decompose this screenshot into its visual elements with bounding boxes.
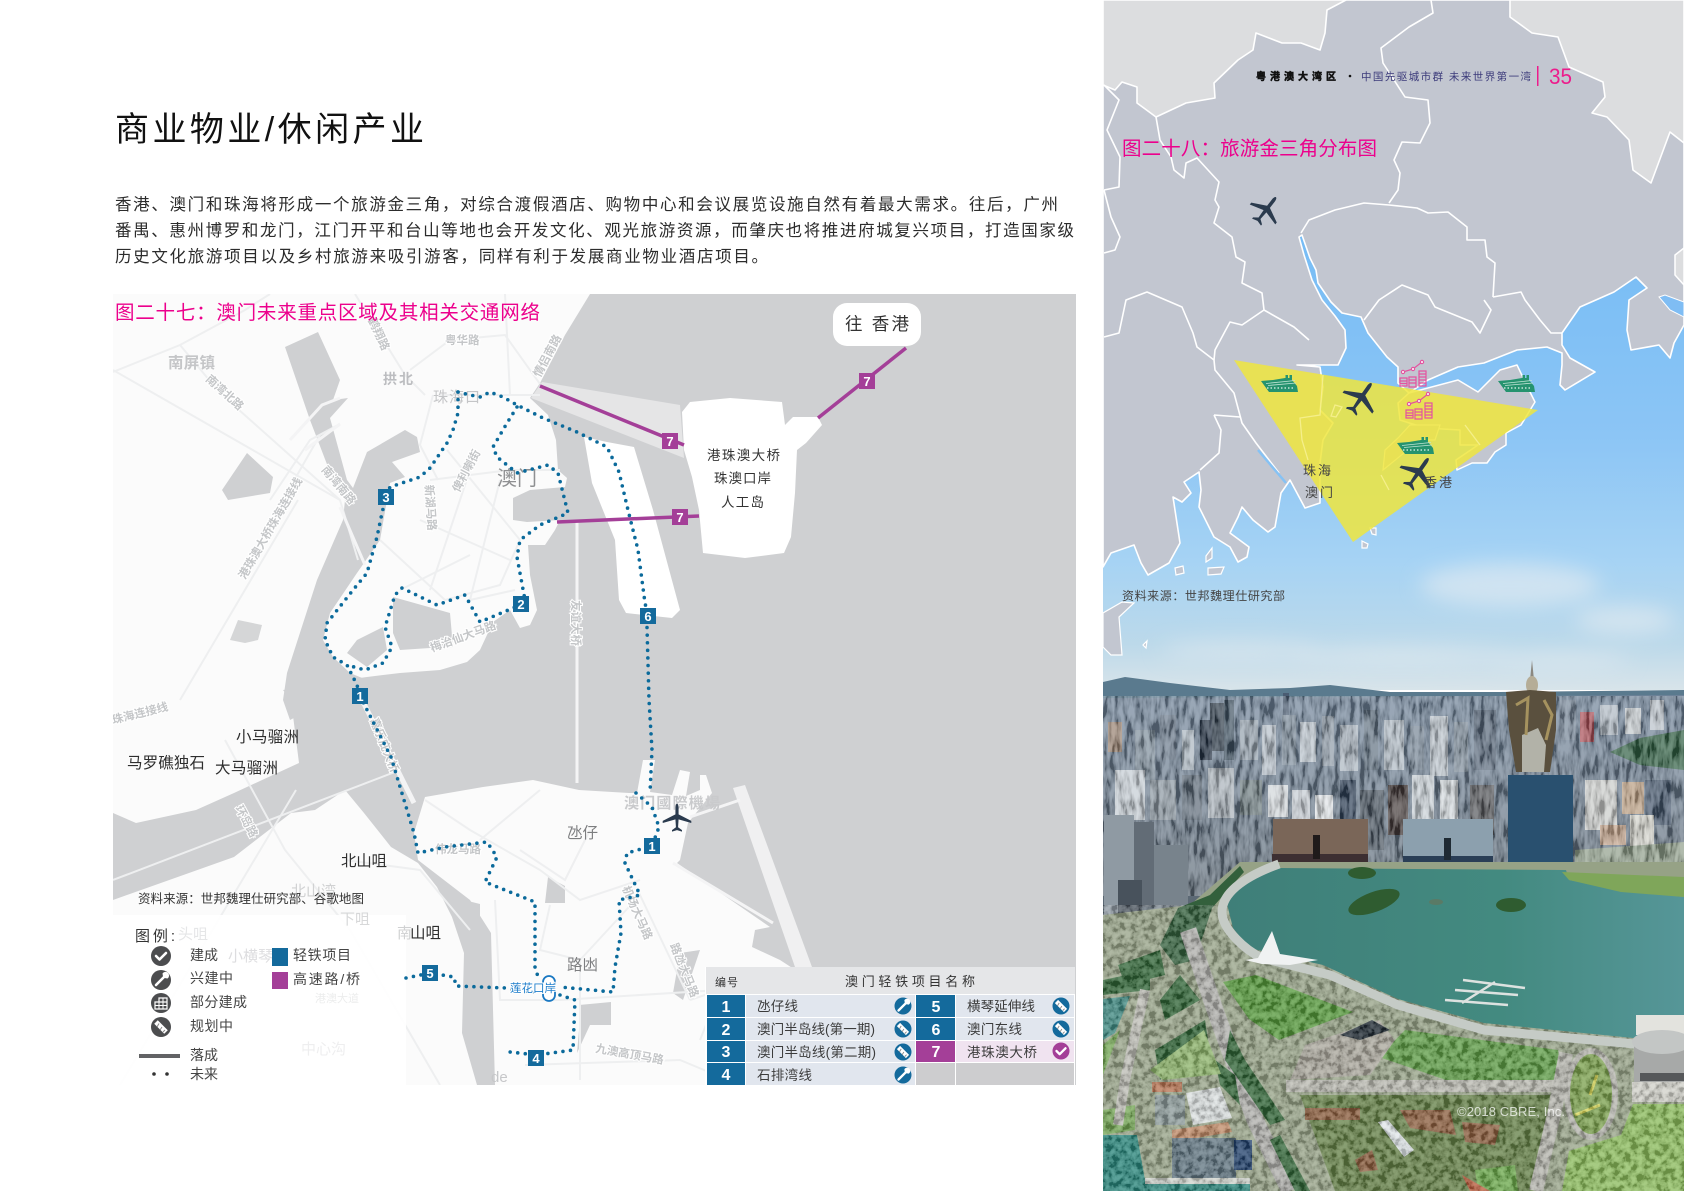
island label: 珠澳口岸	[714, 471, 771, 486]
ship: west	[1261, 375, 1298, 392]
legend: partly built: 部分建成	[190, 994, 247, 1010]
city labels: 澳门	[1305, 485, 1333, 500]
island label: 人工岛	[721, 495, 764, 510]
road and place labels on map: 北山咀	[341, 852, 387, 870]
table: Macau light rail projects: 编号	[715, 975, 738, 989]
white canopy	[1245, 931, 1318, 965]
runway	[733, 785, 812, 967]
water: inner bays	[222, 453, 453, 667]
blue-grey hotel block	[1403, 819, 1493, 865]
row numbers: 3	[722, 1044, 731, 1061]
road and place labels on map: 澳门	[497, 467, 537, 490]
row names: 石排湾线	[757, 1067, 812, 1083]
bottom-left glazed building	[1145, 1122, 1252, 1184]
legend: future dots: 未来	[190, 1066, 218, 1082]
pale fragment at right edge	[1675, 248, 1684, 285]
road and place labels on map: 新湖马路	[422, 484, 439, 532]
route number markers	[352, 373, 875, 1066]
road and place labels on map: 情侣南路	[530, 332, 564, 379]
road and place labels on map: 拱北	[383, 371, 413, 387]
table: Macau light rail projects: 澳门轻铁项目名称	[845, 974, 975, 989]
road and place labels on map	[110, 315, 720, 1067]
island label	[707, 448, 780, 510]
pond	[230, 620, 262, 643]
left-side towers	[1104, 815, 1188, 920]
legend: completed line	[139, 1047, 218, 1063]
legend: light rail swatch	[272, 947, 351, 966]
route number markers: 1	[648, 839, 656, 854]
row names: 澳门东线	[967, 1022, 1022, 1037]
faint labels under legend: 港澳大道	[315, 991, 359, 1005]
page header: 粤港澳大湾区	[1256, 70, 1336, 83]
water: bays in Coloane	[464, 877, 700, 1053]
road and place labels on map: 鹤翔路	[365, 315, 393, 353]
station: Lotus checkpoint: 莲花口岸	[510, 982, 556, 995]
road and place labels on map: 氹仔	[567, 824, 598, 842]
photo: Macau skyline	[1103, 660, 1684, 1191]
figure 27 heading: 图二十七：澳门未来重点区域及其相关交通网络	[115, 302, 540, 324]
brown hotel block	[1272, 819, 1368, 863]
left water	[1103, 996, 1130, 1040]
route number markers: 7	[676, 510, 684, 525]
panel: right column	[1103, 0, 1684, 1191]
row numbers: 7	[932, 1044, 941, 1061]
row names: 澳门半岛线(第一期)	[757, 1021, 875, 1037]
lake	[1227, 868, 1684, 1038]
green plot	[1475, 1165, 1518, 1191]
north-south avenue	[1536, 1053, 1566, 1191]
road and place labels on map: 北山湾	[291, 883, 336, 900]
title: 商业物业/休闲产业	[115, 111, 424, 149]
coin chart icon: upper	[1400, 360, 1426, 387]
road and place labels on map: 友谊大桥	[569, 600, 583, 646]
legend: under construction	[151, 970, 233, 990]
road and place labels on map: 机场大马路	[619, 884, 656, 942]
legend: completed line: 落成	[190, 1047, 218, 1063]
city base	[1103, 695, 1684, 925]
legend: 图例:	[135, 928, 175, 945]
status icons	[894, 998, 1070, 1084]
city labels: 珠海	[1303, 463, 1331, 478]
marina piers	[1445, 980, 1525, 1005]
city labels: 香港	[1424, 475, 1452, 490]
intro paragraph: 香港、澳门和珠海将形成一个旅游金三角，对综合渡假酒店、购物中心和会议展览设施自然有着最大需求。往后，广州	[115, 195, 1058, 214]
blue glass tower	[1508, 775, 1573, 863]
green: park by shore	[1223, 975, 1353, 1040]
golden triangle	[1234, 360, 1538, 542]
route number markers: 2	[517, 597, 525, 612]
plane: south	[1393, 448, 1443, 497]
land: Taipa and Coloane	[414, 760, 812, 1085]
road and place labels on map: 嘉乐庇大桥	[367, 716, 402, 775]
row names: 横琴延伸线	[967, 999, 1035, 1014]
faint labels under legend	[178, 911, 508, 1086]
artificial island	[682, 398, 822, 558]
source note on map: 资料来源：世邦魏理仕研究部、谷歌地图	[138, 891, 364, 906]
bottom-left water	[1103, 1135, 1250, 1191]
rows	[707, 995, 1074, 1085]
promenade	[1222, 864, 1635, 1044]
black roof	[1340, 1020, 1390, 1040]
row numbers: 4	[722, 1067, 731, 1084]
sea and sky	[1103, 230, 1684, 690]
road network	[113, 294, 740, 1085]
legend: light rail swatch: 轻铁项目	[293, 947, 351, 963]
ship: east	[1498, 375, 1535, 392]
top-left pale region	[1103, 0, 1346, 117]
lawn left	[1150, 1030, 1221, 1080]
trees left	[1103, 950, 1310, 1191]
ship icons	[1261, 375, 1298, 392]
coin chart icon: lower	[1406, 392, 1432, 419]
tree belt along road	[1160, 866, 1244, 965]
row names: 港珠澳大桥	[967, 1045, 1038, 1060]
dotted light-rail routes	[325, 392, 659, 1055]
row numbers: 2	[722, 1022, 731, 1039]
faint labels under legend: 中心沟	[301, 1041, 346, 1058]
row names: 澳门半岛线(第二期)	[757, 1044, 876, 1060]
green: central field	[1379, 1030, 1562, 1080]
row numbers: 1	[722, 999, 731, 1016]
green strip on far shore	[1562, 872, 1684, 897]
plane icons	[1244, 187, 1443, 497]
land: south-west Zhuhai	[113, 790, 477, 1085]
city texture	[1103, 696, 1684, 896]
pale roadway right	[1632, 1082, 1684, 1102]
reclaimed land east of Macau	[584, 437, 680, 618]
map land	[1103, 0, 1684, 575]
icon: airport plane	[663, 804, 691, 832]
island label: 港珠澳大桥	[707, 448, 780, 463]
Grand Lisboa tower	[1506, 660, 1556, 772]
white shed	[1378, 1120, 1414, 1157]
bottom-right lawn	[1562, 1104, 1684, 1191]
legend: planned	[151, 1017, 233, 1037]
row numbers: 6	[932, 1022, 941, 1039]
depot area	[1300, 1095, 1550, 1191]
light wedge: bridge channel	[531, 382, 684, 458]
page header	[1256, 64, 1572, 89]
station: Lotus checkpoint	[510, 976, 556, 1001]
legend: future dots	[152, 1066, 218, 1082]
road and place labels on map: 俾利喇街	[449, 447, 483, 494]
road and place labels on map: 澳门國際機場	[624, 794, 720, 812]
right-hand low buildings and greenery	[1575, 842, 1684, 885]
bridges	[290, 398, 773, 923]
road and place labels on map: 珠海连接线	[110, 699, 170, 727]
legend: highway swatch	[272, 971, 360, 989]
circular building	[1632, 1015, 1684, 1082]
row numbers	[722, 999, 941, 1084]
callout: to Hong Kong: 往 香港	[845, 314, 910, 334]
copyright: ©2018 CBRE, Inc.	[1457, 1104, 1565, 1119]
construction site	[1290, 1020, 1395, 1080]
page header: 中国先驱城市群 未来世界第一湾	[1361, 70, 1532, 83]
legend backing	[113, 915, 406, 1085]
road and place labels on map: 南湾南路	[319, 463, 359, 508]
land: Zhuhai and Macau peninsula	[113, 294, 590, 823]
main diagonal road	[1188, 930, 1290, 1191]
route number markers: 1	[356, 689, 364, 704]
route number markers: 3	[382, 490, 390, 505]
faint labels under legend: 南	[397, 925, 412, 942]
road and place labels on map: 路凼	[567, 956, 598, 974]
city labels	[1303, 463, 1452, 500]
faint labels under legend: 头咀	[178, 926, 208, 943]
mountains	[1103, 677, 1684, 715]
legend: built	[151, 946, 218, 966]
foreground ground	[1103, 862, 1684, 1191]
green hill	[1610, 730, 1684, 770]
city towers	[1108, 693, 1671, 855]
plane: north	[1244, 187, 1289, 232]
figure 28 heading: 图二十八：旅游金三角分布图	[1122, 138, 1377, 160]
route number markers: 6	[644, 609, 652, 624]
row names	[757, 999, 1038, 1083]
route number markers: 5	[426, 966, 434, 981]
road and place labels on map: 路氹大马路	[667, 941, 702, 1000]
faint labels under legend: 下咀	[340, 911, 370, 928]
route number markers: 4	[532, 1051, 540, 1066]
road and place labels on map: 大马骝洲	[215, 759, 278, 777]
small water inlet at right edge	[1659, 295, 1684, 317]
outlying islands	[1103, 528, 1376, 655]
Hong Kong land	[1398, 365, 1535, 470]
intro paragraph: 历史文化旅游项目以及乡村旅游来吸引游客，同样有利于发展商业物业酒店项目。	[115, 247, 768, 266]
Lantau island	[1383, 425, 1440, 470]
legend	[135, 928, 360, 1082]
legend: built: 建成	[190, 947, 218, 963]
brown roofs	[1305, 1108, 1500, 1172]
road and place labels on map: 马罗礁独石	[127, 754, 205, 772]
road and place labels on map: 珠海口	[433, 389, 480, 406]
water: inner harbour channels	[283, 332, 420, 720]
legend: under construction: 兴建中	[190, 970, 233, 986]
purple highway lines	[540, 348, 906, 522]
row names: 氹仔线	[757, 999, 798, 1014]
oval garden	[1564, 1048, 1618, 1140]
foreground texture	[1103, 905, 1684, 1191]
intro paragraph	[115, 195, 1074, 266]
road and place labels on map: 小马骝洲	[236, 728, 299, 746]
bottom-left white roof building	[1152, 1082, 1232, 1125]
ship: centre	[1397, 437, 1434, 454]
table: Macau light rail projects	[705, 967, 1075, 1085]
road and place labels on map: 梅治仙大马路	[428, 618, 498, 655]
legend: partly built	[151, 993, 247, 1013]
road and place labels on map: 港珠澳大桥珠海连接线	[235, 474, 305, 582]
coast lines inside triangle	[1300, 375, 1480, 490]
road and place labels on map: 环岛路	[232, 803, 261, 840]
left greens	[1103, 1030, 1135, 1135]
thin river	[1258, 450, 1286, 483]
route number markers: 7	[863, 374, 871, 389]
faint labels under legend: de	[491, 1069, 508, 1086]
clouds	[1160, 563, 1675, 667]
lake islands	[1345, 867, 1526, 921]
road and place labels on map: 九澳高顶马路	[594, 1041, 665, 1067]
faint labels under legend: 小横琴	[228, 948, 273, 965]
road and place labels on map: 伟龙马路	[435, 842, 481, 856]
road and place labels on map: 南湾北路	[203, 372, 247, 413]
route number markers: 7	[666, 434, 674, 449]
plane: centre	[1336, 373, 1386, 422]
left path road	[1118, 990, 1145, 1125]
road and place labels on map: 粤华路	[445, 333, 480, 347]
page header: 35	[1549, 64, 1572, 89]
east-west avenue	[1286, 1080, 1561, 1092]
top-right pale region	[1510, 0, 1684, 183]
faint labels under legend: 山咀	[410, 924, 441, 942]
row numbers: 5	[932, 999, 941, 1016]
administrative boundaries	[1104, 0, 1562, 473]
legend: planned: 规划中	[190, 1018, 233, 1034]
road and place labels on map: 南屏镇	[168, 354, 215, 372]
intro paragraph: 番禺、惠州博罗和龙门，江门开平和台山等地也会开发文化、观光旅游资源，而肇庆也将推进府城复兴项目，打造国家级	[115, 221, 1074, 240]
orange bus	[1462, 1175, 1490, 1191]
callout: to Hong Kong	[833, 303, 921, 346]
panel: Macau transport map	[110, 294, 1076, 1086]
legend: highway swatch: 高速路/桥	[293, 971, 360, 987]
source note right: 资料来源：世邦魏理仕研究部	[1122, 588, 1285, 603]
